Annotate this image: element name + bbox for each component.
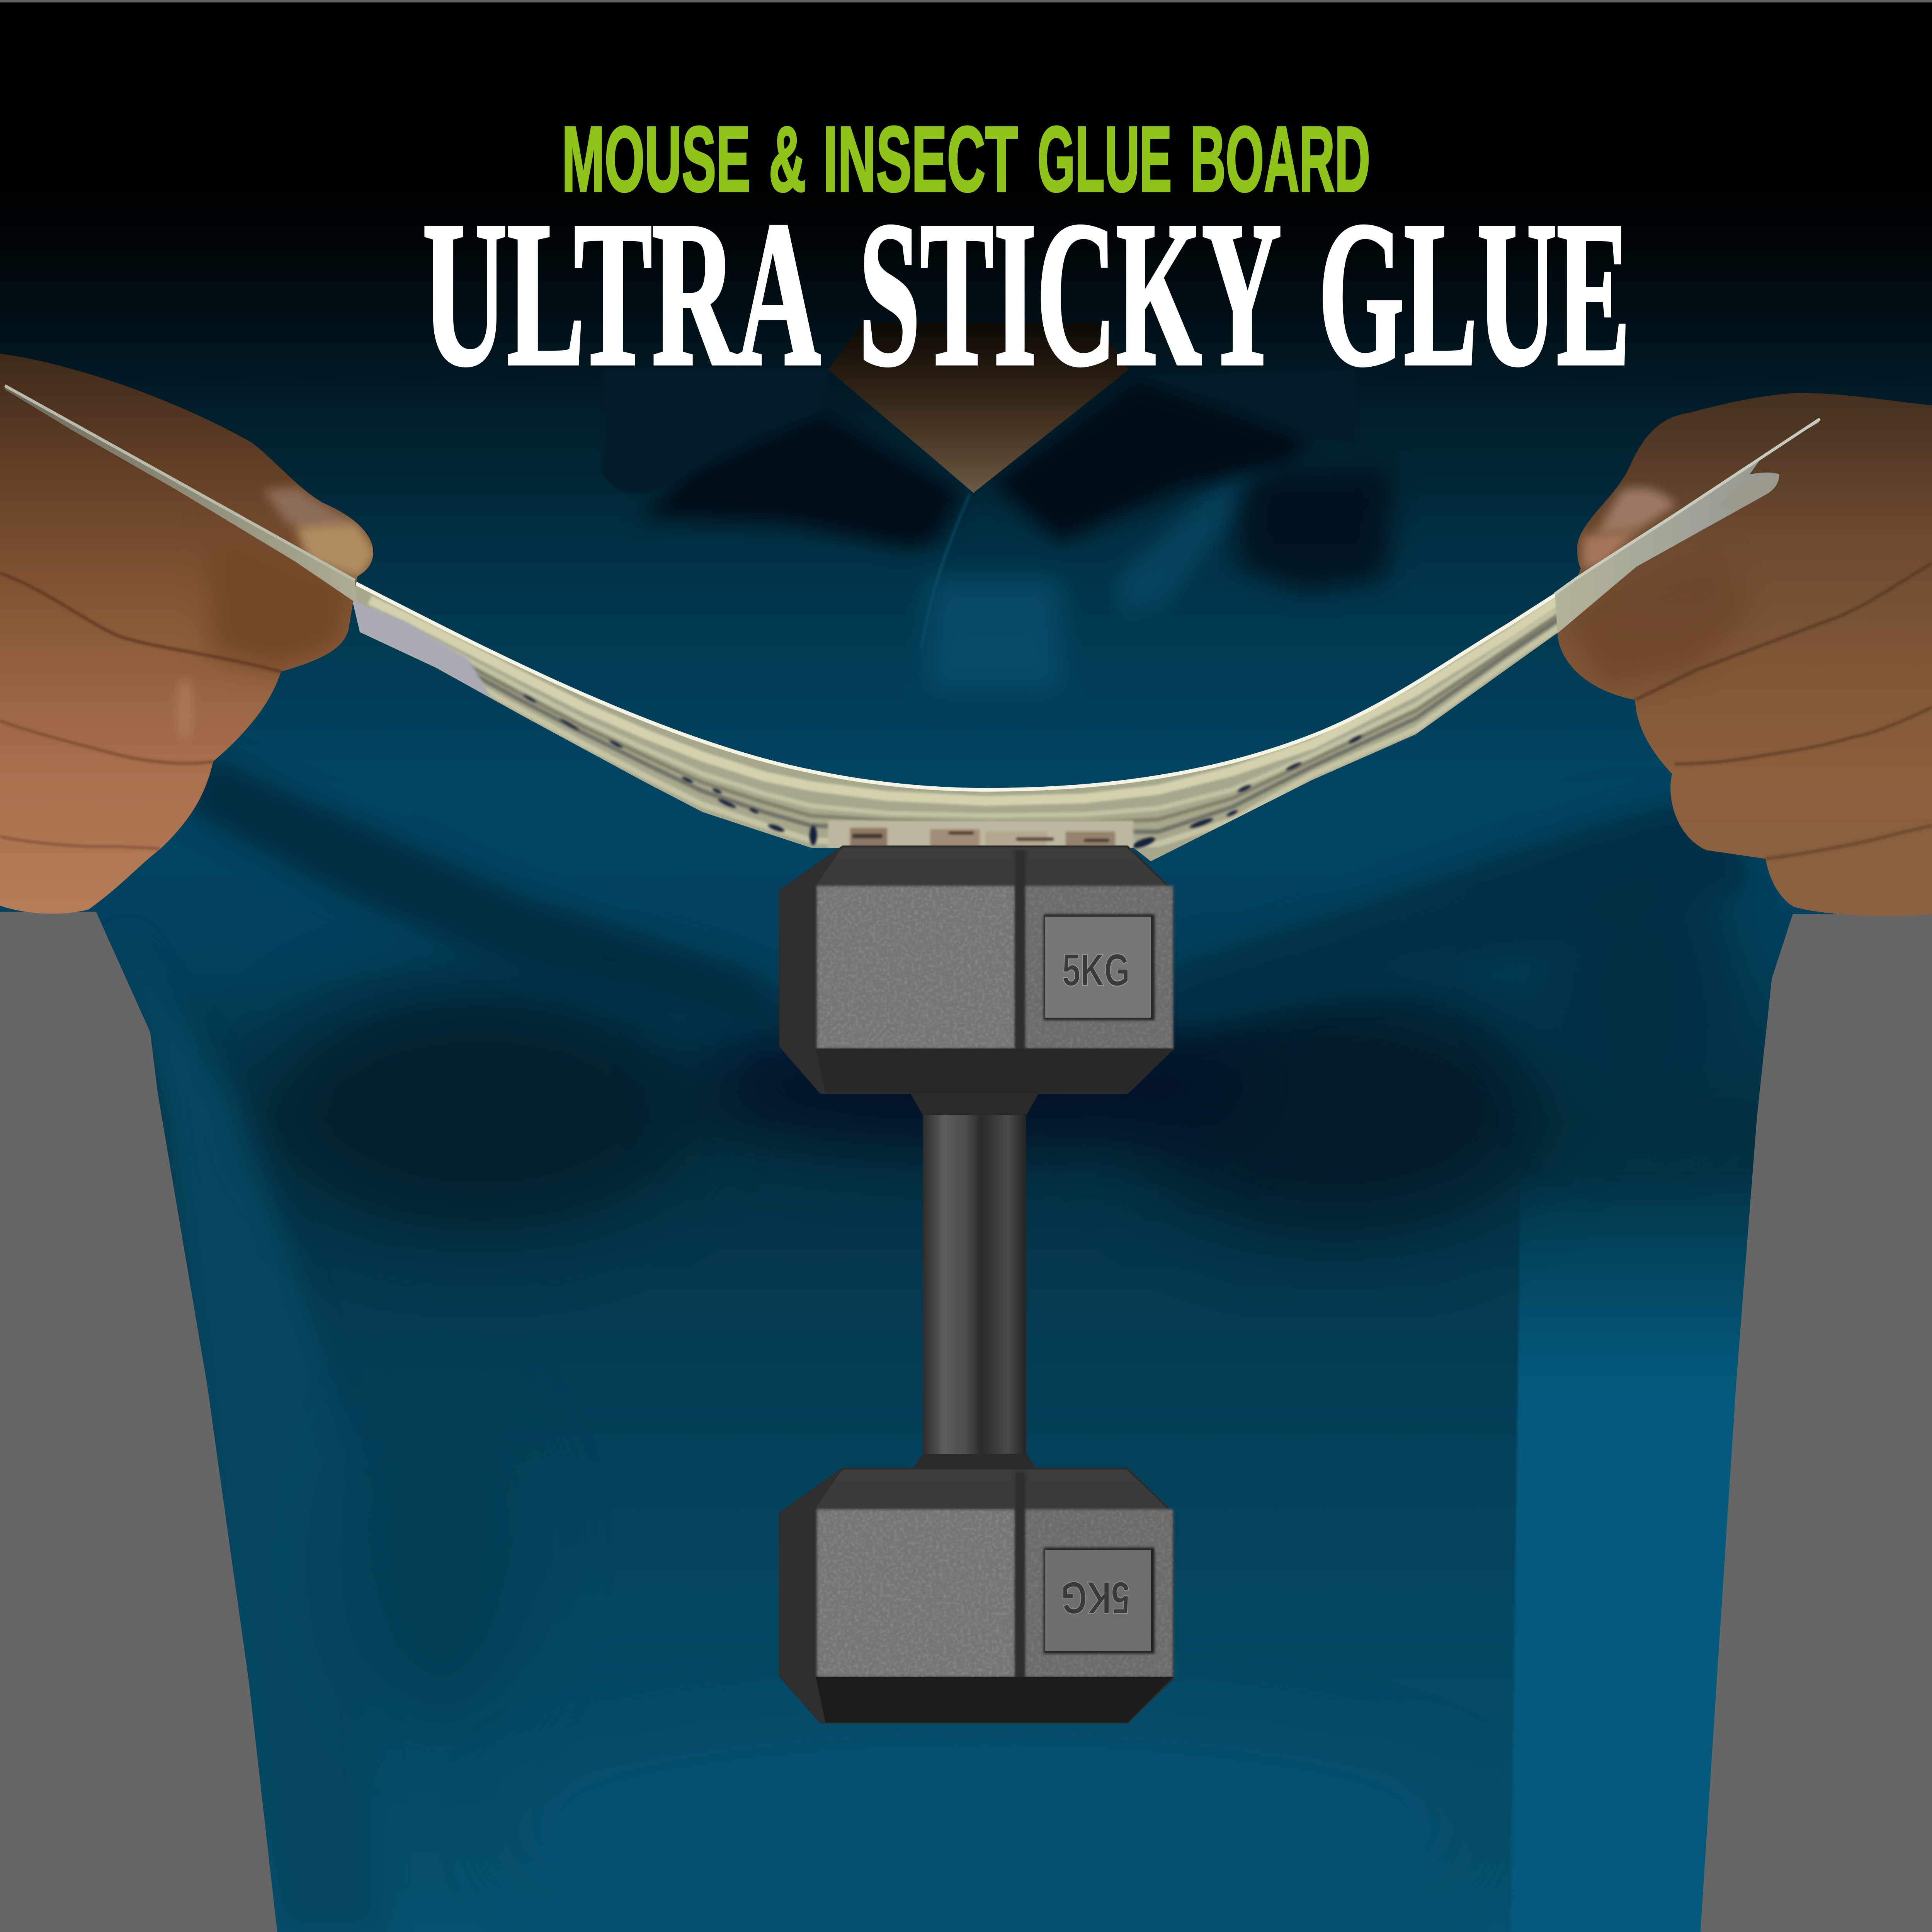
label plate xyxy=(1044,914,1155,1020)
top dark gradient xyxy=(0,0,1932,690)
shirt front placket and folds xyxy=(922,462,1392,690)
subtitle: & xyxy=(769,107,806,211)
dumbbell handle xyxy=(909,1092,1040,1471)
right hand xyxy=(1558,393,1932,916)
glue board xyxy=(347,573,1590,861)
title: GLUE xyxy=(1318,179,1630,408)
title: STICKY xyxy=(859,179,1281,408)
board dark speckles xyxy=(523,694,1363,850)
title: ULTRA xyxy=(423,179,821,408)
collar xyxy=(601,370,1359,493)
subtitle xyxy=(562,107,1370,211)
board lavender underside xyxy=(347,598,493,700)
board glossy bands xyxy=(370,579,1590,845)
top edge line xyxy=(0,0,1932,2)
glue contact strip xyxy=(828,821,1134,849)
label plate upside down: 5KG xyxy=(1061,1572,1130,1623)
neck xyxy=(828,323,1129,493)
subtitle: MOUSE xyxy=(562,107,750,211)
label plate: 5KG xyxy=(1062,945,1130,996)
subtitle: GLUE xyxy=(1037,107,1172,211)
subtitle: INSECT xyxy=(823,107,1018,211)
left board end over hand xyxy=(5,386,357,604)
board white top edge xyxy=(347,573,1590,790)
collar shadows xyxy=(641,382,1315,548)
subtitle: BOARD xyxy=(1190,107,1370,211)
title xyxy=(423,179,1630,408)
dumbbell lower head xyxy=(780,1469,1173,1723)
label plate upside down xyxy=(1044,1548,1155,1653)
right board end over hand xyxy=(1555,419,1820,633)
left hand xyxy=(0,354,377,914)
dumbbell xyxy=(780,847,1173,1723)
dumbbell upper head xyxy=(780,847,1173,1093)
